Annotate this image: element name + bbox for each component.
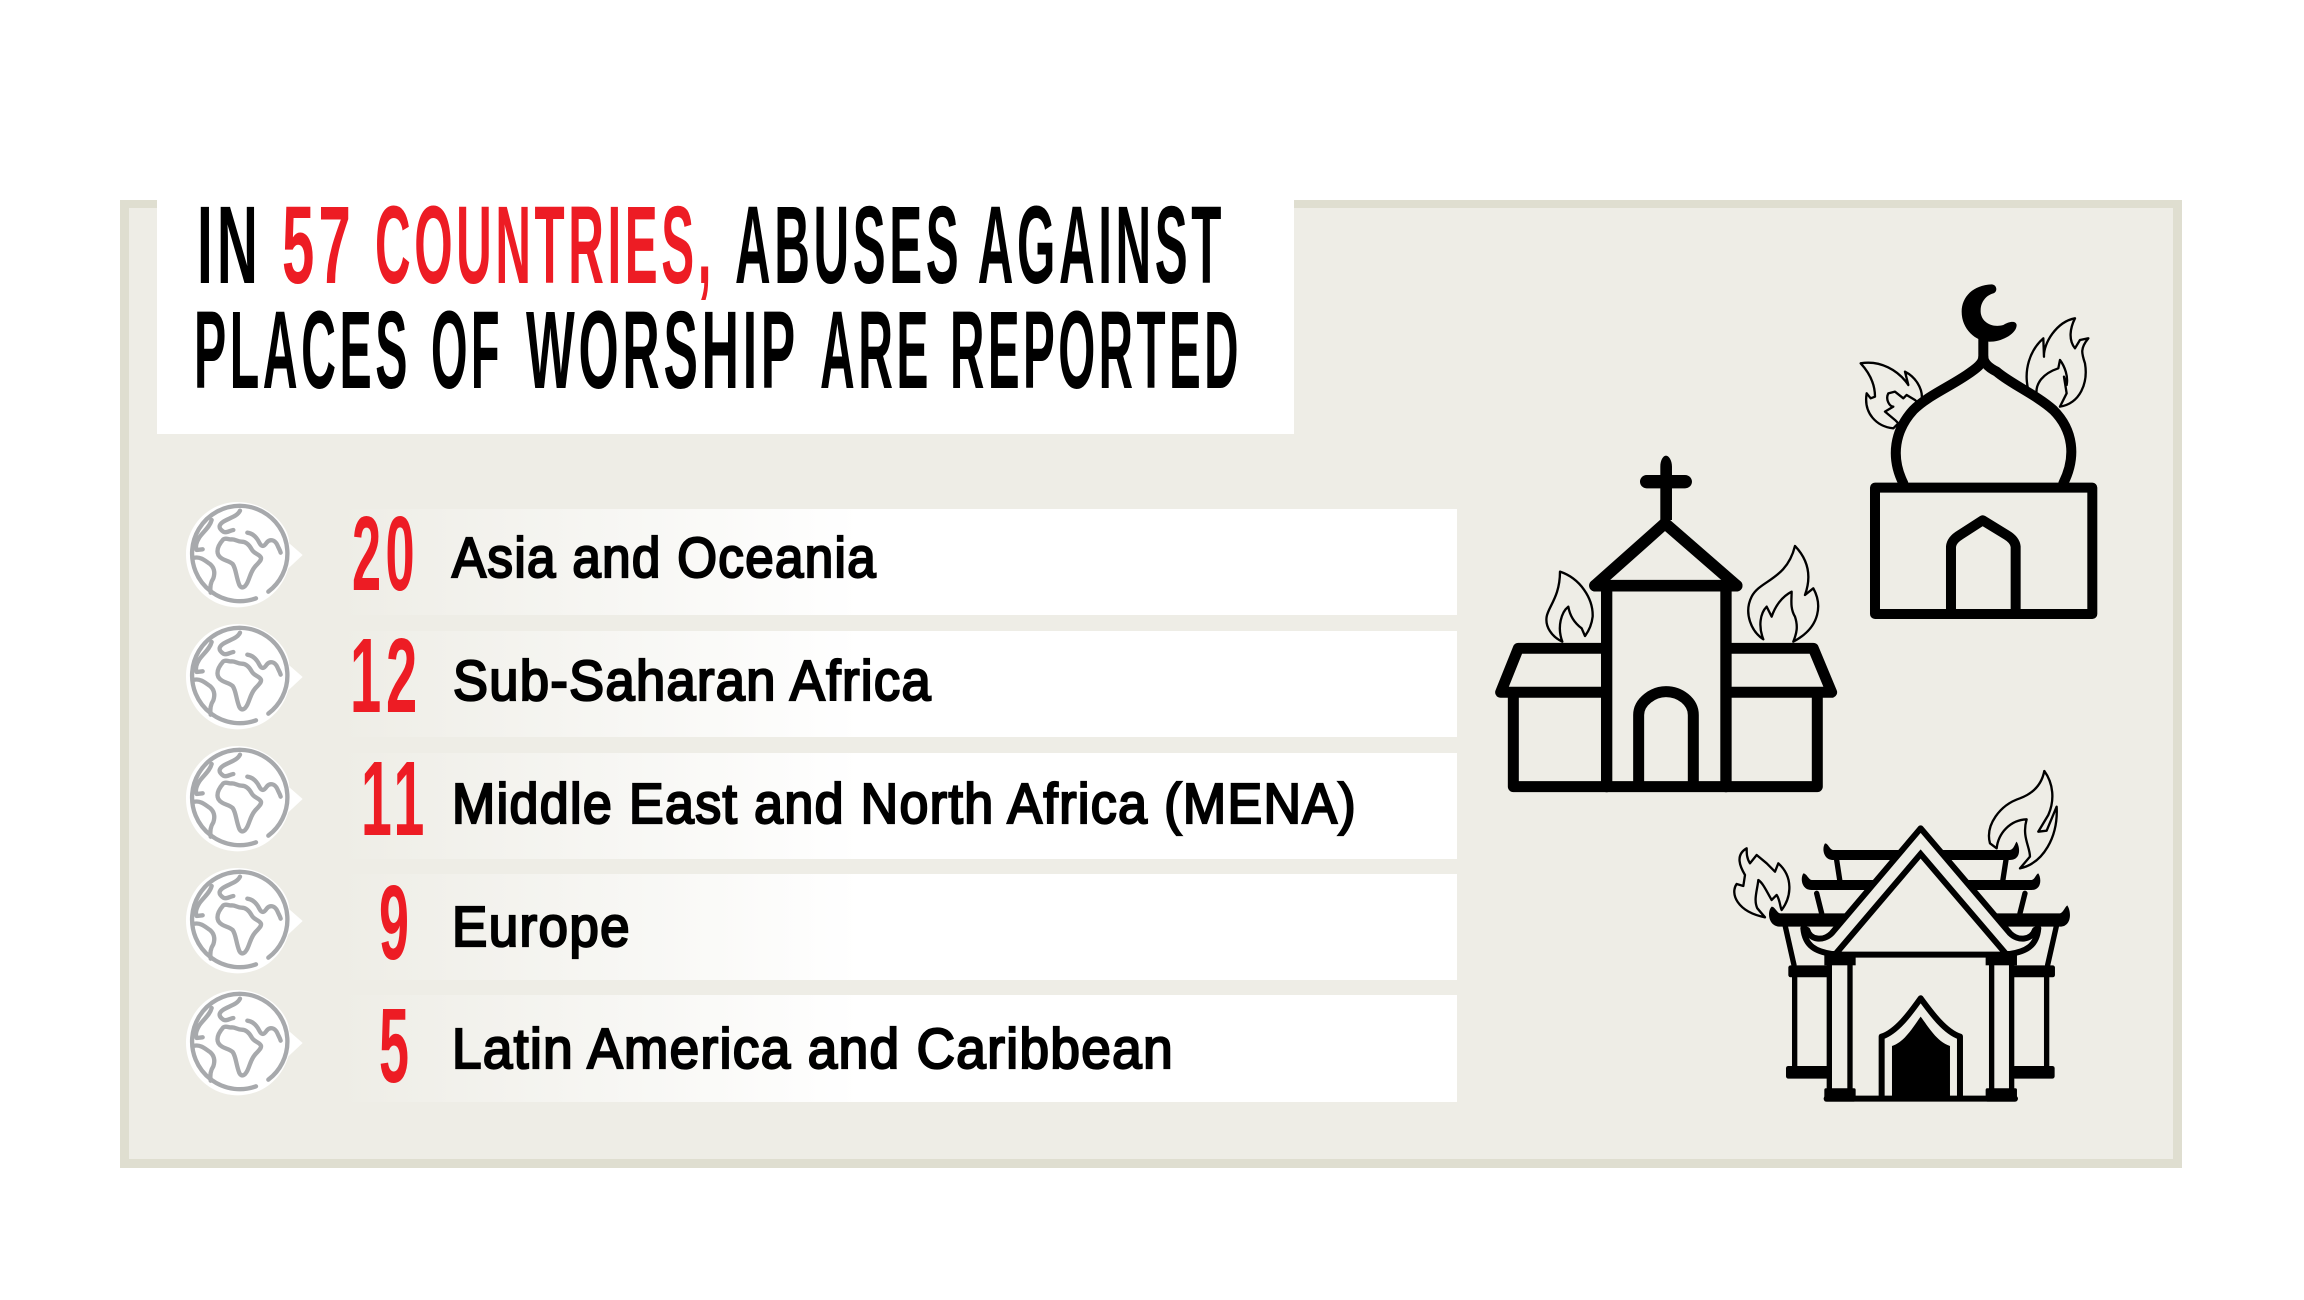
title box: REPORTED — [950, 289, 1242, 412]
row: Asia and Oceania — [186, 495, 1457, 615]
row: Middle East and North Africa — [186, 740, 1457, 859]
title line 2: ARE — [820, 289, 932, 412]
label: Latin America and Caribbean: Latin America and Caribbean — [452, 1017, 1174, 1081]
number: 12: 12 — [350, 617, 422, 735]
icon: globe — [186, 624, 303, 729]
title line 1: COUNTRIES, — [375, 184, 715, 307]
number: 9: 9 — [379, 864, 409, 982]
row: Latin America and Caribbean — [186, 987, 1457, 1105]
number: 5: 5 — [379, 987, 409, 1105]
icon: globe — [186, 990, 303, 1095]
icon: globe — [186, 502, 303, 607]
label: Sub-Saharan Africa: Sub-Saharan Africa — [453, 649, 932, 713]
row: Sub-Saharan Africa — [186, 617, 1457, 737]
label: Middle East and North Africa (MENA): Middle East and North Africa (MENA) — [452, 772, 1357, 836]
title box — [157, 184, 1294, 434]
icon: burning temple — [1734, 771, 2070, 1102]
title line 2: OF — [431, 289, 503, 412]
title line 1: 57 — [282, 184, 355, 307]
number: 11: 11 — [361, 740, 429, 858]
title box: ABUSES AGAINST — [735, 184, 1225, 307]
label: Europe: Europe — [452, 895, 631, 959]
icon: burning mosque — [1861, 284, 2092, 614]
panel: background — [120, 200, 2182, 1168]
title line 2: WORSHIP — [526, 289, 799, 412]
title line 1: IN — [197, 184, 262, 307]
row: Europe — [186, 864, 1457, 982]
title line 2: PLACES — [194, 289, 411, 412]
title line 2 — [194, 289, 1242, 412]
label: Asia and Oceania: Asia and Oceania — [452, 526, 877, 590]
icon: globe — [186, 868, 303, 973]
icon: globe — [186, 746, 303, 851]
row: Asia and Oceania: 20 — [352, 495, 419, 613]
icon: burning church — [1501, 456, 1832, 787]
